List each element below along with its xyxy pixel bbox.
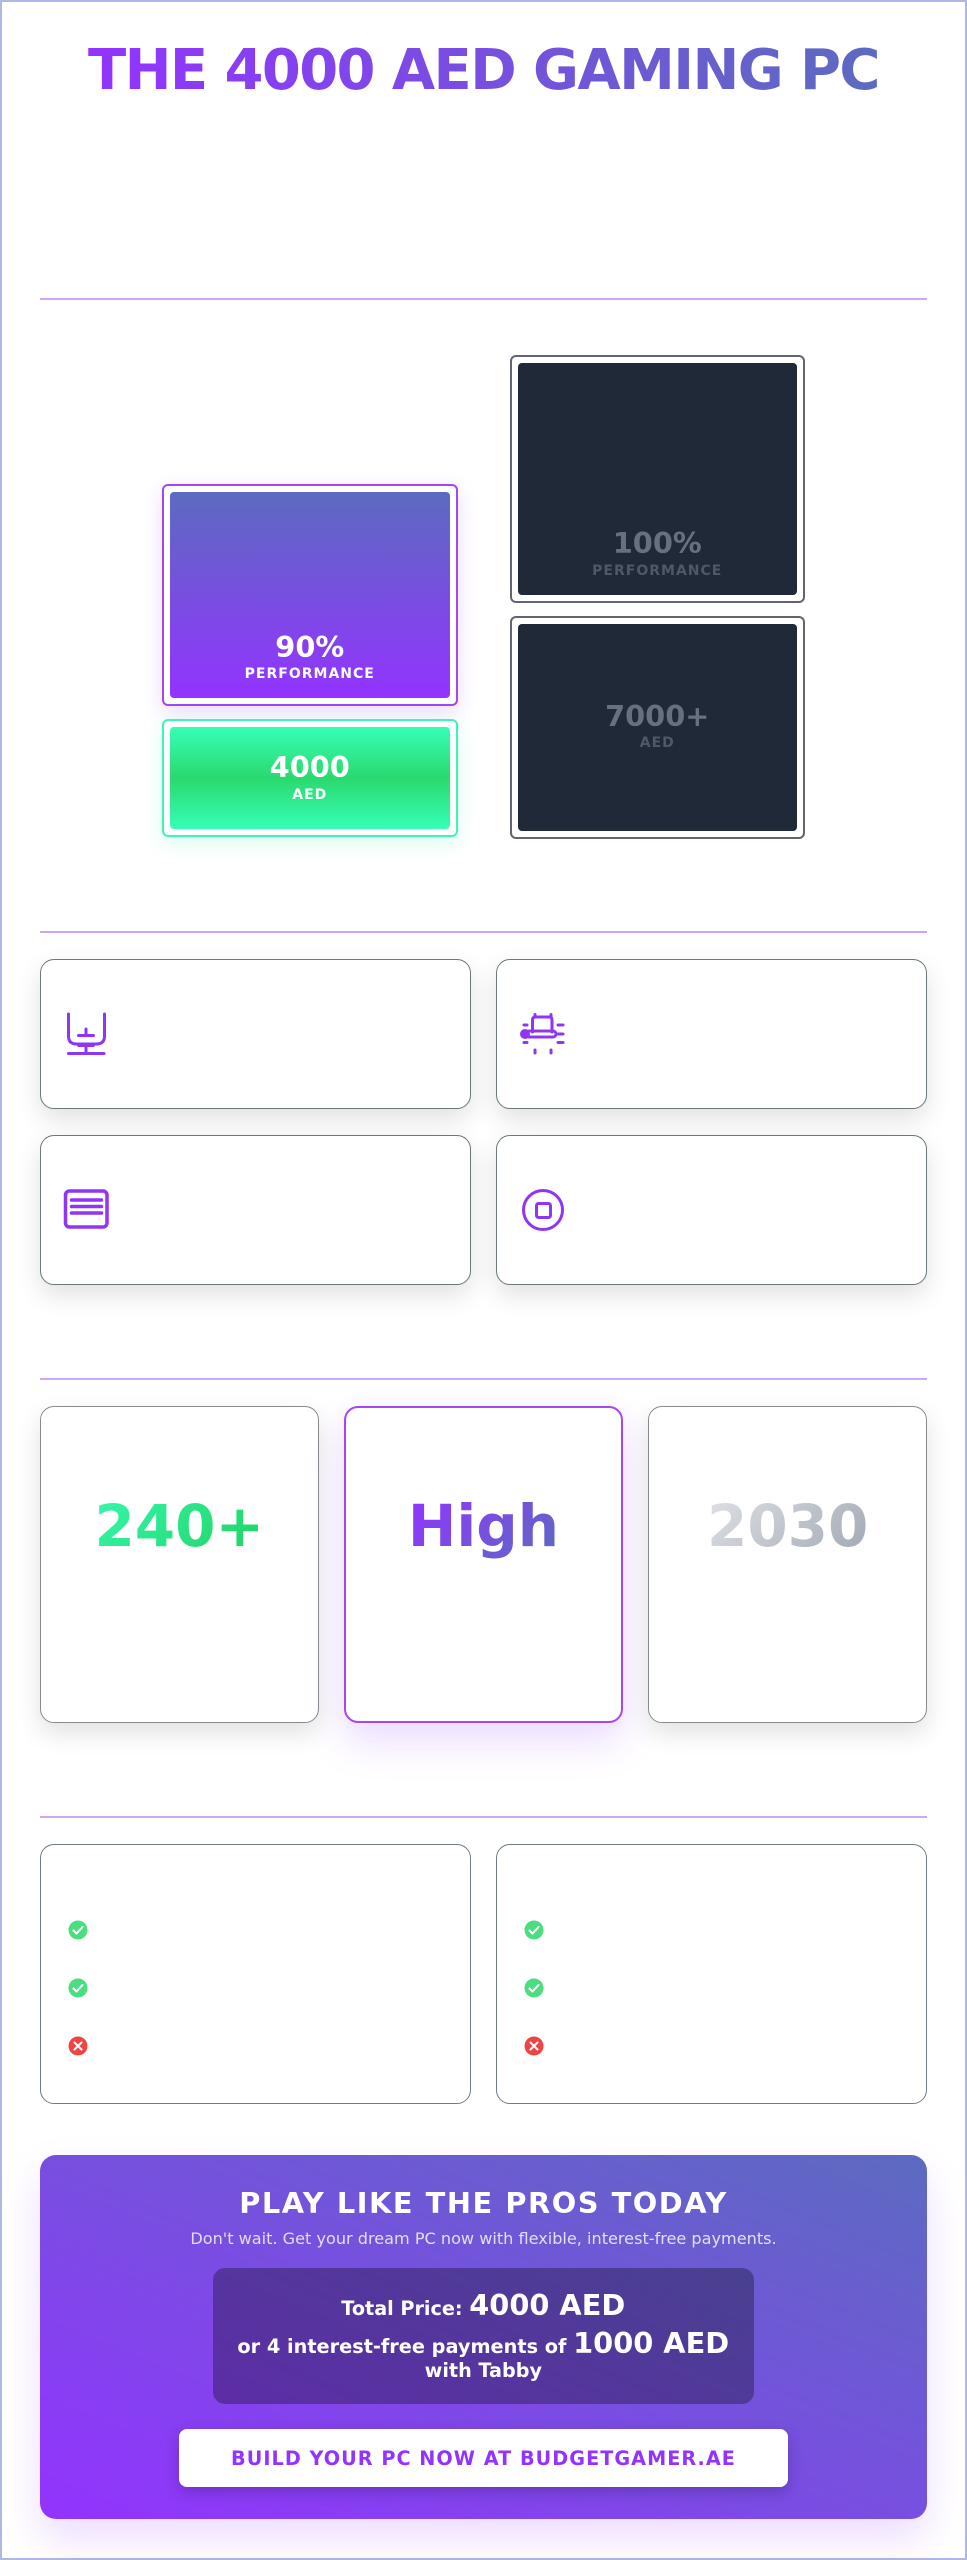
- bar: 4000 AED: AED: [292, 787, 327, 803]
- panel: left: [40, 1844, 471, 2104]
- bar: 90% performance: [162, 484, 458, 706]
- card: memory: [40, 1135, 471, 1285]
- title: THE 4000 AED GAMING PC: [88, 38, 879, 103]
- stat: 240+: [40, 1406, 319, 1723]
- cta button: [179, 2429, 788, 2487]
- divider: [40, 298, 927, 300]
- card: keyboard / gpu: [496, 959, 927, 1109]
- bar: 100% performance: PERFORMANCE: [592, 563, 722, 579]
- feature cards: [33, 959, 934, 1302]
- divider: [40, 1816, 927, 1818]
- tabby note: with Tabby: [425, 2359, 542, 2382]
- icon: check: [68, 1978, 88, 1998]
- price box: [213, 2268, 754, 2404]
- comparison panels: [40, 1844, 927, 2104]
- installment price: or 4 interest-free payments of 1000 AED: [237, 2326, 729, 2360]
- cta heading: PLAY LIKE THE PROS TODAY: [239, 2186, 728, 2220]
- total price: Total Price: 4000 AED: [341, 2288, 625, 2322]
- cta subheading: Don't wait. Get your dream PC now with flexible, interest-free payments.: [190, 2228, 777, 2248]
- bar: 7000+ AED: 7000+: [605, 699, 709, 733]
- card: monitor: [40, 959, 471, 1109]
- icon: list panel: [64, 1189, 109, 1229]
- bar: 7000+ AED: AED: [640, 735, 675, 751]
- comparison bars: [154, 355, 805, 852]
- stat: 2030: 2030: [707, 1492, 868, 1560]
- icon: monitor: [67, 1012, 106, 1055]
- stat cards: [33, 1405, 934, 1757]
- icon: circled square: [522, 1189, 564, 1231]
- divider: [40, 931, 927, 933]
- icon: cross: [524, 2036, 544, 2056]
- bar: 100% performance: 100%: [613, 526, 702, 560]
- icon: cross: [68, 2036, 88, 2056]
- panel: right: [496, 1844, 927, 2104]
- icon: gpu: [520, 1013, 564, 1054]
- call to action panel: [40, 2155, 927, 2519]
- bar: 90% performance: PERFORMANCE: [245, 666, 375, 682]
- icon: check: [524, 1920, 544, 1940]
- icon: check: [524, 1978, 544, 1998]
- bar: 4000 AED: 4000: [270, 750, 350, 784]
- stat: 2030: [648, 1406, 927, 1723]
- card: storage: [496, 1135, 927, 1285]
- cta button: BUILD YOUR PC NOW AT BUDGETGAMER.AE: [231, 2447, 736, 2470]
- divider: [40, 1378, 927, 1380]
- stat: High: [344, 1406, 623, 1723]
- bar: 4000 AED: [162, 719, 458, 837]
- bar: 90% performance: 90%: [275, 630, 344, 664]
- bar: 7000+ AED: [510, 616, 805, 839]
- bar: 100% performance: [510, 355, 805, 603]
- stat: High: High: [408, 1492, 559, 1560]
- icon: check: [68, 1920, 88, 1940]
- stat: 240+: 240+: [94, 1492, 264, 1560]
